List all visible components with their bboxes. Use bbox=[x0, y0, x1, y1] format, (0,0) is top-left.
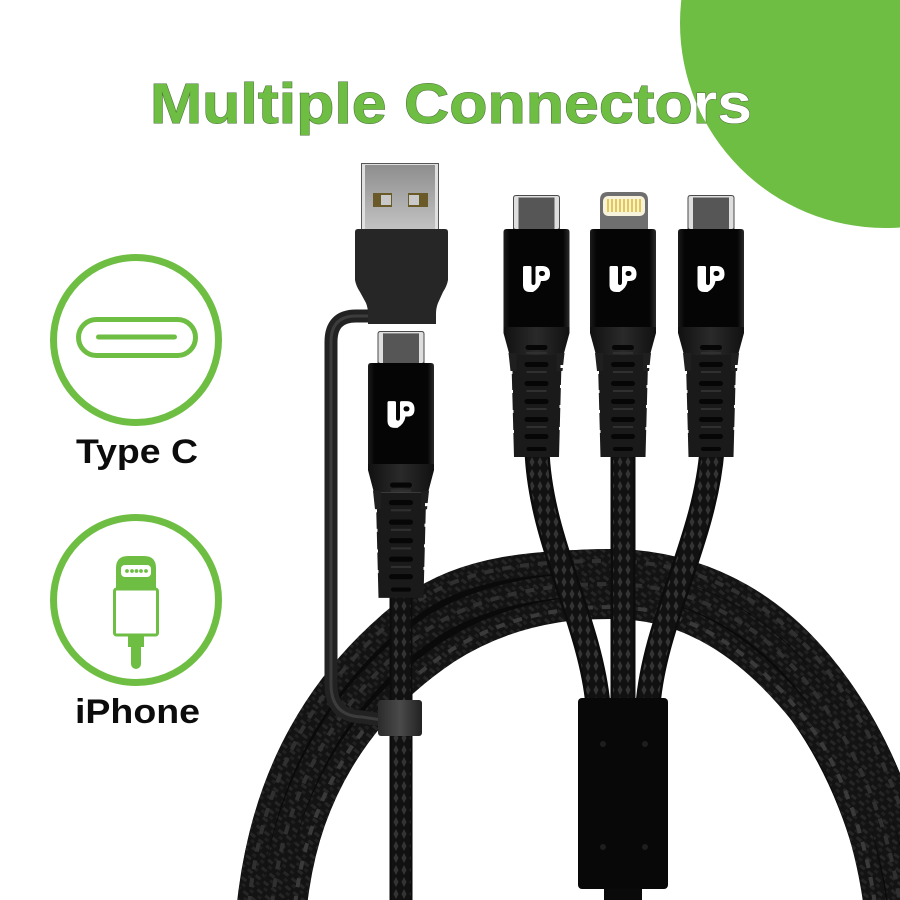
type C connector 2 bbox=[678, 195, 744, 457]
label: iPhone: iPhone bbox=[75, 693, 200, 731]
left type C connector bbox=[368, 331, 434, 598]
right braided cables bbox=[537, 450, 712, 705]
wire collar bbox=[378, 700, 422, 736]
green corner circle bbox=[680, 0, 900, 228]
icon: iPhone lightning plug bbox=[54, 518, 218, 682]
lightning connector bbox=[590, 192, 656, 457]
USB-A connector bbox=[355, 163, 448, 324]
adapter side wire bbox=[331, 316, 382, 720]
title: Multiple Connectors bbox=[150, 72, 752, 136]
splitter box bbox=[578, 698, 668, 900]
label: Type C: Type C bbox=[76, 433, 198, 471]
icon: Type C port bbox=[54, 258, 218, 422]
coiled braided cable bbox=[249, 561, 900, 900]
left type C adapter cable bbox=[390, 590, 412, 900]
type C connector 1 bbox=[504, 195, 570, 457]
